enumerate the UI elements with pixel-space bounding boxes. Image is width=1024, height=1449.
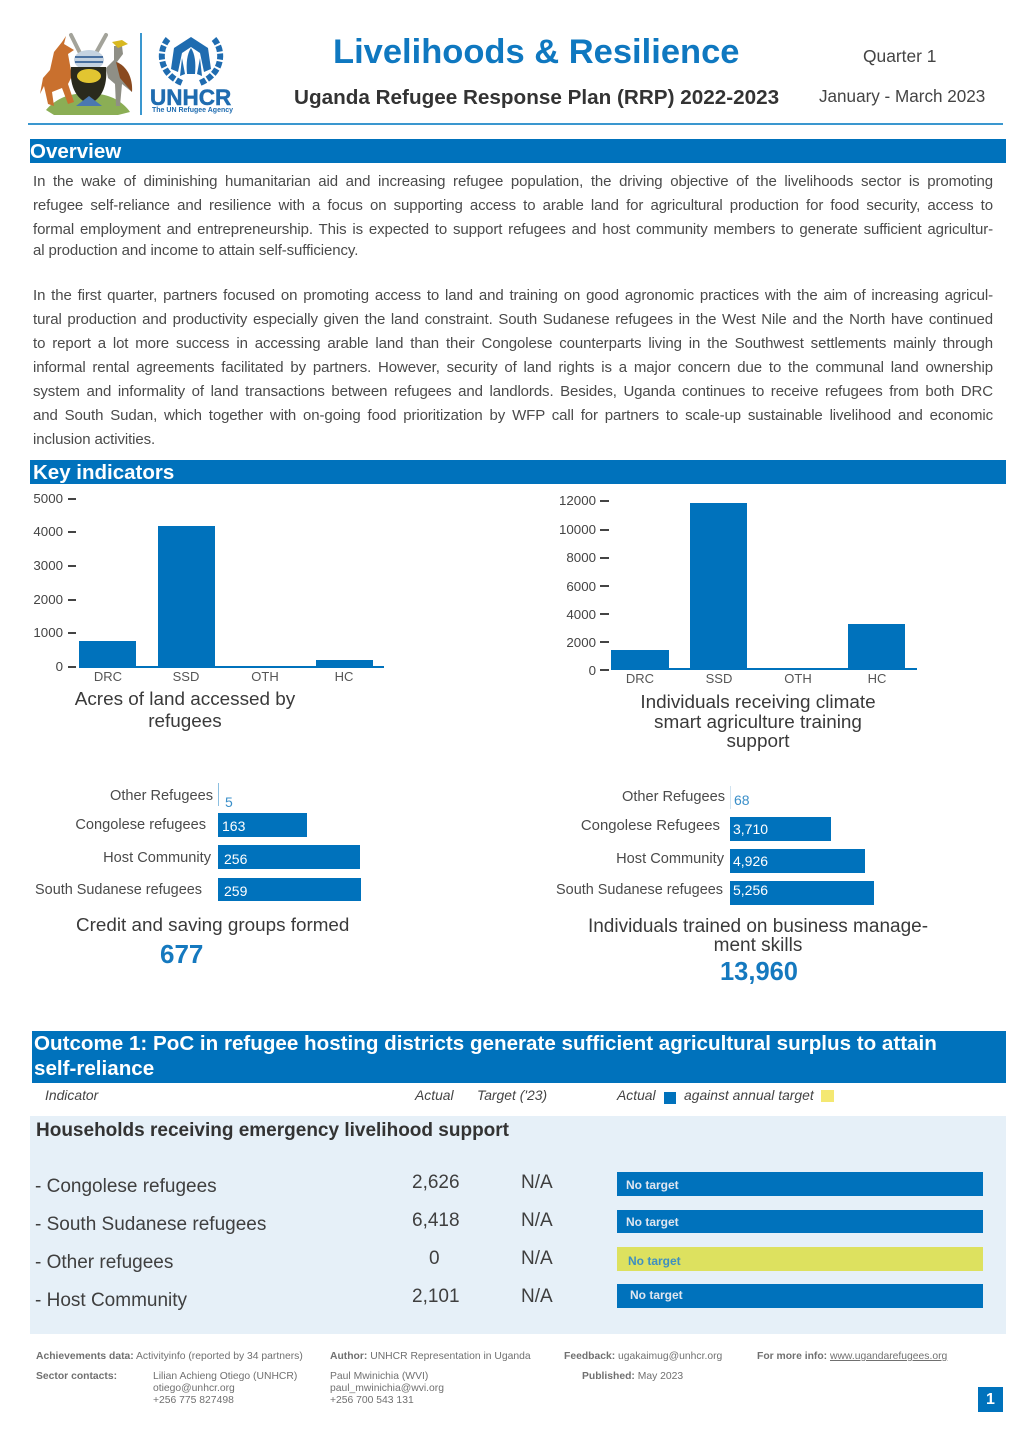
heading: key indicators — [30, 460, 1006, 484]
chart: acres of land accessed: 5000 — [33, 491, 63, 506]
logo: UNHCR: UNHCR — [150, 85, 231, 110]
logo: UNHCR: The UN Refugee Agency — [152, 107, 233, 114]
bar chart: credit and saving groups — [35, 783, 361, 901]
header rule — [28, 123, 1003, 125]
bar chart: credit and saving groups: Congolese refugees — [75, 817, 206, 833]
footer: Paul Mwinichia (WVI) — [330, 1371, 428, 1382]
chart: climate smart training: 6000 — [566, 579, 596, 594]
row: Host: 2,101 — [412, 1286, 460, 1307]
heading: outcome 1: Outcome 1: PoC in refugee hosting districts generate sufficient agricultural surplus to attain — [34, 1032, 937, 1055]
chart caption: acres — [74, 689, 296, 732]
row: South Sudanese: No target — [626, 1215, 679, 1229]
row: Other — [35, 1247, 983, 1273]
table header: Indicator — [45, 1087, 98, 1103]
chart: climate smart training: 0 — [589, 663, 596, 678]
table group heading: Households receiving emergency livelihood support — [36, 1120, 509, 1141]
row: South Sudanese: 6,418 — [412, 1210, 460, 1231]
chart: climate smart training: DRC — [626, 671, 654, 686]
footer: +256 700 543 131 — [330, 1395, 414, 1406]
bar chart: business management training: 5,256 — [733, 882, 768, 898]
table header: Target ('23) — [477, 1087, 547, 1103]
logo: UNHCR — [150, 37, 233, 114]
overview paragraph 2: inclusion activities. — [33, 431, 155, 448]
footer: Sector contacts: — [36, 1371, 117, 1382]
heading: key indicators: Key indicators — [33, 461, 174, 484]
overview paragraph 2: to report a lot more success in accessing arable land than their Congolese counterparts living in the Southwest settlements mainly through — [33, 335, 993, 352]
chart: acres of land accessed: DRC — [94, 669, 122, 684]
overview paragraph 2: system and informality of land transactions between refugees and landlords. Besides, Uganda continues to receive refugees from both DRC — [33, 383, 993, 400]
chart: climate smart training: OTH — [784, 671, 812, 686]
chart: acres of land accessed: 2000 — [33, 592, 63, 607]
footer: Feedback: ugakaimug@unhcr.org — [564, 1351, 722, 1362]
bar chart: credit and saving groups: 259 — [224, 883, 247, 899]
row: Congolese: N/A — [521, 1172, 553, 1193]
bar chart: business management training: Host Community — [616, 851, 724, 867]
heading: overview: Overview — [30, 140, 121, 163]
row: Other: No target — [628, 1254, 681, 1268]
table header: against annual target — [684, 1087, 814, 1103]
subtitle: Uganda Refugee Response Plan (RRP) 2022-2023 — [294, 86, 779, 109]
page number — [978, 1387, 1003, 1412]
caption: business skills: Individuals trained on business manage- — [588, 916, 928, 937]
page number: 1 — [986, 1391, 995, 1408]
overview paragraph 1 — [33, 173, 993, 259]
chart: climate smart training: 12000 — [559, 493, 596, 508]
overview paragraph 2: In the first quarter, partners focused on promoting access to land and training on good agronomic practices with the aim of increasing agricul- — [33, 287, 993, 304]
figure: 677: 677 — [160, 939, 203, 969]
overview paragraph 1: al production and income to attain self-sufficiency. — [33, 242, 358, 259]
footer: For more info: www.ugandarefugees.org — [757, 1351, 947, 1362]
row: Congolese: No target — [626, 1178, 679, 1192]
footer: Author: UNHCR Representation in Uganda — [330, 1351, 531, 1362]
footer: otiego@unhcr.org — [153, 1383, 235, 1394]
heading: outcome 1: self-reliance — [34, 1056, 154, 1080]
row: Host: N/A — [521, 1286, 553, 1307]
bar chart: credit and saving groups: 5 — [225, 794, 233, 810]
bar chart: business management training: South Sudanese refugees — [556, 882, 723, 898]
caption: business skills: ment skills — [714, 935, 802, 956]
caption: business skills — [588, 916, 928, 956]
row: South Sudanese: - South Sudanese refugees — [35, 1214, 266, 1235]
row: Other: - Other refugees — [35, 1252, 173, 1273]
chart: climate smart training — [559, 493, 917, 686]
heading: outcome 1 — [32, 1031, 1006, 1083]
row: South Sudanese: N/A — [521, 1210, 553, 1231]
footer: paul_mwinichia@wvi.org — [330, 1383, 444, 1394]
title: Livelihoods & Resilience — [333, 33, 739, 71]
row: South Sudanese — [35, 1210, 983, 1235]
row: Other: N/A — [521, 1248, 553, 1269]
chart caption: climate training: Individuals receiving climate — [640, 692, 876, 713]
chart caption: acres: refugees — [148, 711, 222, 732]
caption: credit groups: Credit and saving groups formed — [76, 914, 349, 935]
chart: climate smart training: 4000 — [566, 607, 596, 622]
chart caption: climate training: support — [726, 731, 790, 752]
logo divider — [140, 33, 142, 115]
quarter: Quarter 1 — [863, 46, 936, 66]
chart: acres of land accessed: SSD — [173, 669, 199, 684]
footer: Lilian Achieng Otiego (UNHCR) — [153, 1371, 297, 1382]
chart caption: climate training — [640, 692, 876, 752]
overview paragraph 2 — [33, 287, 993, 448]
chart: acres of land accessed: 4000 — [33, 524, 63, 539]
row: Host: No target — [630, 1288, 683, 1302]
bar chart: credit and saving groups: Host Community — [103, 850, 211, 866]
row: Host — [35, 1284, 983, 1311]
bar chart: business management training: Other Refugees — [622, 789, 725, 805]
heading: overview — [30, 139, 1006, 163]
overview paragraph 2: and South Sudan, which together with on-going food prioritization by WFP call for partners to scale-up sustainable livelihood and economic — [33, 407, 993, 424]
overview paragraph 2: tural production and productivity especially given the land constraint. South Sudanese refugees in the West Nile and the North have continued — [33, 311, 993, 328]
bar chart: business management training: 3,710 — [733, 821, 768, 837]
chart caption: climate training: smart agriculture training — [654, 712, 862, 732]
bar chart: credit and saving groups: 256 — [224, 851, 247, 867]
row: Congolese: - Congolese refugees — [35, 1176, 217, 1197]
bar chart: credit and saving groups: South Sudanese refugees — [35, 882, 202, 898]
row: Host: - Host Community — [35, 1290, 187, 1311]
footer: Achievements data: Activityinfo (reported by 34 partners) — [36, 1351, 303, 1362]
overview paragraph 1: formal employment and entrepreneurship. This is expected to support refugees and host community members to generate sufficient agricultur- — [33, 221, 993, 238]
chart: acres of land accessed: OTH — [251, 669, 279, 684]
figure: 13,960: 13,960 — [720, 958, 798, 986]
chart: climate smart training: 2000 — [566, 635, 596, 650]
bar chart: business management training — [556, 786, 874, 905]
row: Congolese — [35, 1172, 983, 1197]
table header: Actual — [415, 1087, 454, 1103]
table header: Actual — [617, 1087, 656, 1103]
chart: acres of land accessed — [33, 491, 384, 684]
chart caption: acres: Acres of land accessed by — [75, 689, 295, 710]
chart: climate smart training: HC — [868, 671, 886, 686]
overview paragraph 1: In the wake of diminishing humanitarian aid and increasing refugee population, the driving objective of the livelihoods sector is promoting — [33, 173, 993, 190]
row: Other: 0 — [429, 1248, 440, 1269]
chart: acres of land accessed: 3000 — [33, 558, 63, 573]
table panel — [30, 1116, 1006, 1334]
bar chart: credit and saving groups: 163 — [222, 818, 245, 834]
chart: climate smart training: 8000 — [566, 550, 596, 565]
bar chart: credit and saving groups: Other Refugees — [110, 788, 213, 804]
chart: climate smart training: 10000 — [559, 522, 596, 537]
overview paragraph 2: informal rental agreements facilitated by partners. However, security of land rights is a major concern due to the communal land ownership — [33, 359, 993, 376]
table header — [45, 1087, 834, 1104]
bar chart: business management training: Congolese Refugees — [581, 818, 720, 834]
footer: +256 775 827498 — [153, 1395, 234, 1406]
overview paragraph 1: refugee self-reliance and resilience with a focus on supporting access to arable land for agricultural production for food security, access to — [33, 197, 993, 214]
period: January - March 2023 — [819, 87, 985, 106]
logo: Uganda coat of arms — [40, 32, 132, 115]
bar chart: business management training: 4,926 — [733, 853, 768, 869]
footer: Published: May 2023 — [582, 1371, 683, 1382]
chart: acres of land accessed: 1000 — [33, 625, 63, 640]
chart: acres of land accessed: 0 — [56, 659, 63, 674]
footer — [36, 1351, 948, 1406]
bar chart: business management training: 68 — [734, 792, 750, 808]
chart: acres of land accessed: HC — [335, 669, 353, 684]
chart: climate smart training: SSD — [706, 671, 732, 686]
row: Congolese: 2,626 — [412, 1172, 460, 1193]
